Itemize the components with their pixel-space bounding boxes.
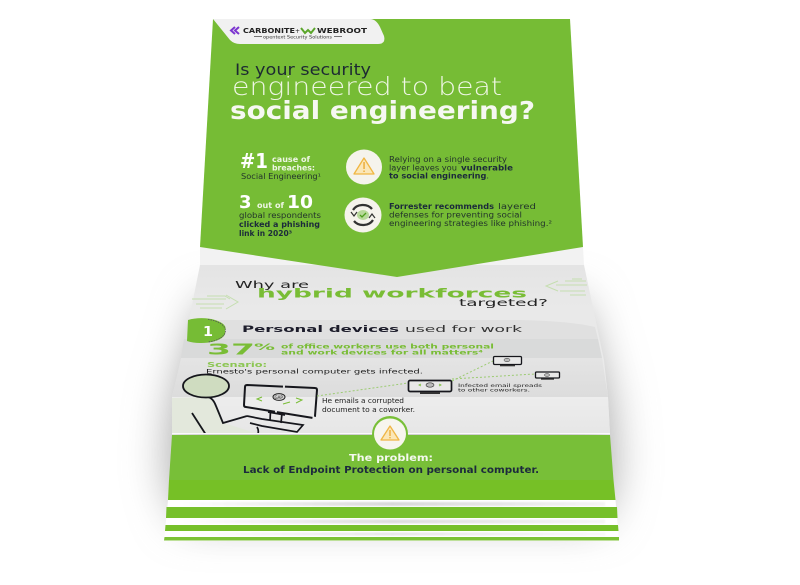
- stat: number one cause: #1: [240, 149, 268, 173]
- text: corrupted document: He emails a corrupted: [322, 397, 404, 405]
- text: single security layer: layer leaves you: [389, 164, 457, 172]
- stat: three out of ten: [239, 192, 321, 238]
- text: single security layer: Relying on a single security: [389, 155, 507, 164]
- virus icon: [257, 397, 302, 403]
- stat: three out of ten: 3: [239, 192, 252, 213]
- section heading: why hybrid workforces: [235, 280, 548, 309]
- drop shadow: [168, 300, 614, 520]
- logo text: CARBONITE: [243, 27, 296, 35]
- title: engineered to beat: [232, 72, 502, 101]
- illustration: person at computer: GAP: [274, 395, 283, 400]
- text: forrester recommendation: Forrester recommends: [389, 202, 494, 211]
- problem text: Lack of Endpoint Protection on personal computer.: [243, 465, 539, 476]
- number badge: 1: [203, 325, 213, 340]
- stat: three out of ten: out of: [257, 201, 285, 210]
- stat: number one cause: breaches:: [272, 164, 315, 172]
- icon: layered defense check: [344, 198, 382, 232]
- band: 37 percent: [181, 339, 602, 358]
- panel: top green section: [200, 19, 583, 277]
- section heading: why hybrid workforces: Why are: [235, 280, 309, 291]
- band: personal devices: [184, 320, 598, 339]
- text: single security layer: vulnerable: [461, 164, 514, 172]
- panel: lower gray section: [172, 247, 610, 434]
- stat: 37 percent: [207, 340, 494, 358]
- icon: arrows right: [546, 279, 587, 295]
- logo plate: [213, 19, 384, 44]
- section 1 header: used for work: [405, 325, 523, 335]
- text: single security layer: to social engineering .: [389, 172, 489, 180]
- icon: center computer: [408, 380, 452, 394]
- band: outcome: [172, 397, 610, 434]
- text: forrester recommendation: layered: [498, 202, 536, 211]
- stacked pages below: [164, 500, 619, 541]
- infographic mockup: [164, 19, 619, 541]
- title: social engineering?: [230, 96, 535, 125]
- icon: warning badge: [372, 416, 408, 452]
- section 1 header: [187, 318, 523, 343]
- section heading: why hybrid workforces: hybrid workforces: [257, 286, 527, 300]
- number badge: [187, 318, 226, 343]
- text: corrupted document: document to a coworker.: [322, 406, 415, 414]
- stat: 37 percent: and work devices for all matters⁴: [281, 350, 483, 356]
- person body: [172, 397, 257, 434]
- stat: three out of ten: clicked a phishing: [239, 220, 320, 229]
- icon: warning triangle: [346, 150, 382, 184]
- text: forrester recommendation: defenses for preventing social: [389, 210, 522, 220]
- stand and keyboard: [247, 411, 303, 434]
- stat: 37 percent: %: [254, 343, 275, 353]
- stat: three out of ten: 10: [287, 192, 313, 213]
- stat: number one cause: Social Engineering¹: [241, 172, 321, 181]
- section heading: why hybrid workforces: targeted?: [459, 298, 548, 309]
- dotted connector lines: [317, 361, 535, 396]
- icon: right computer: [536, 372, 560, 380]
- panel: the problem: [168, 416, 616, 500]
- illustration: person at computer: [172, 374, 317, 434]
- title: [230, 60, 535, 125]
- stat: 37 percent: of office workers use both personal: [281, 344, 494, 350]
- text: forrester recommendation: [389, 202, 552, 228]
- stat: number one cause: [240, 149, 321, 181]
- text: single security layer: [389, 155, 514, 180]
- text: infected email spreads: Infected email spreads: [458, 383, 543, 389]
- problem text: [243, 453, 539, 476]
- icon: top right computer: [494, 356, 522, 366]
- logo text: WEBROOT: [317, 27, 368, 35]
- scenario text: [206, 361, 423, 376]
- title: Is your security: [235, 60, 371, 79]
- scenario text: Scenario:: [207, 361, 267, 369]
- band: scenario: [172, 358, 608, 397]
- scenario text: Ernesto's personal computer gets infected.: [206, 368, 423, 376]
- problem text: The problem:: [349, 453, 433, 464]
- stat: number one cause: cause of: [272, 155, 311, 164]
- section 1 header: Personal devices: [242, 325, 399, 335]
- stat: three out of ten: global respondents: [239, 211, 321, 220]
- stat: three out of ten: link in 2020³: [239, 229, 292, 238]
- text: corrupted document: [322, 397, 415, 414]
- main monitor: [244, 385, 317, 418]
- text: infected email spreads: to other coworkers.: [458, 388, 530, 394]
- text: forrester recommendation: engineering strategies like phishing.²: [389, 219, 552, 228]
- stat: 37 percent: 37: [207, 340, 255, 358]
- person head: [183, 374, 229, 398]
- text: infected email spreads: [458, 383, 543, 394]
- logo text: [231, 27, 368, 40]
- logo text: +: [295, 28, 300, 35]
- logo text: opentext Security Solutions: [263, 34, 333, 40]
- icon: arrows left: [192, 295, 238, 309]
